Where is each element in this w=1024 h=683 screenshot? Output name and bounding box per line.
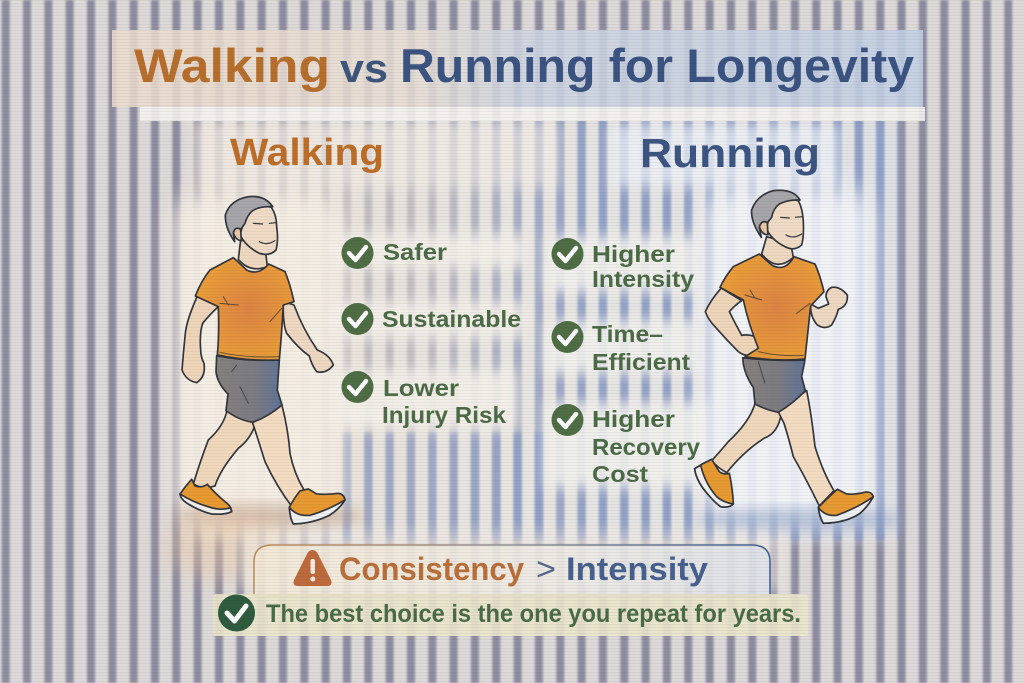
text: Safer: Safer [383,239,447,265]
text: Time-Efficient: Time– [592,321,663,347]
title band [112,30,925,121]
text: Consistency > Intensity: Intensity [566,551,708,587]
heading: Walking: Walking [230,132,384,174]
front shoe [818,489,873,523]
text: Lower Injury Risk: Lower [383,375,459,401]
front arm [811,287,847,327]
text: Higher Recovery Cost: Recovery [592,434,700,460]
title [134,39,914,92]
callout panel [254,545,770,596]
title: Walking [134,39,330,92]
icon: takeaway check [218,594,255,632]
green takeaway band [213,594,808,636]
neck [762,237,793,264]
text: Lower Injury Risk [382,375,506,428]
shirt [720,254,824,360]
back leg [712,403,781,473]
text: Time-Efficient: Efficient [592,349,690,375]
icon: warning triangle [294,550,332,586]
text: Higher Recovery Cost: Cost [592,461,648,487]
text: Higher Intensity [592,241,694,292]
check: higher recovery cost [552,404,584,436]
ear [233,228,241,241]
face lines [781,217,802,237]
walker figure [180,196,345,524]
hair [752,190,800,237]
shorts [216,356,282,422]
check: time-efficient [552,321,584,353]
text: Lower Injury Risk: Injury Risk [382,402,506,428]
check: lower injury risk [342,371,374,403]
title: Running for Longevity [400,39,914,92]
face lines [253,223,276,244]
neck [238,240,267,269]
runner figure [695,190,873,523]
bottom callout [213,545,808,636]
back arm [705,288,759,355]
head [240,206,278,254]
back arm [182,296,218,383]
text: Consistency > Intensity [339,551,708,587]
check: safer [342,237,374,269]
front leg [777,391,834,506]
text: Time-Efficient [592,321,690,375]
front leg [252,404,304,507]
text: takeaway: The best choice is the one you repeat for years. [266,600,801,628]
check: higher intensity [552,238,584,270]
head [766,200,803,249]
front shoe [289,489,345,524]
back shoe [695,459,733,507]
running benefits [552,238,700,487]
shirt [195,258,294,360]
shirt folds [220,297,282,403]
text: Higher Recovery Cost: Higher [592,406,675,432]
walking benefits [342,237,521,428]
text: Consistency > Intensity: Consistency [339,551,524,587]
text: Consistency > Intensity: > [536,551,556,587]
title: vs [340,47,388,91]
check: sustainable [342,303,374,335]
front arm [283,302,333,372]
central washed panel [165,120,905,592]
heading: Running: Running [640,130,820,176]
back leg [193,408,256,488]
hair [225,196,273,242]
text: Higher Recovery Cost [592,406,700,487]
shorts [743,358,805,412]
shirt folds [745,290,810,383]
text: Sustainable: Sustainable [382,306,521,332]
ear [759,221,768,235]
back shoe [180,479,232,514]
text: Higher Intensity: Higher [592,241,675,267]
text: Higher Intensity: Intensity [592,266,694,292]
